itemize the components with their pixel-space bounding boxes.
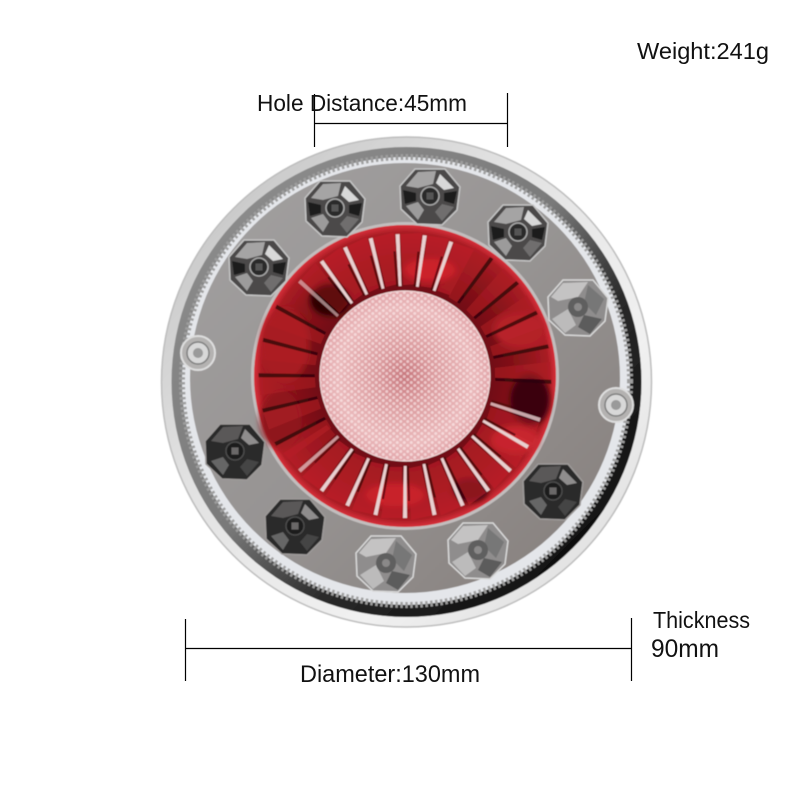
mottled reflections on the lens sides	[260, 258, 550, 507]
red lens	[251, 222, 559, 530]
thickness label: 90mm	[651, 635, 719, 663]
radial facets on the lens sides	[258, 247, 551, 461]
hole distance label: Hole Distance:45mm	[257, 90, 467, 116]
textured bezel ring	[182, 157, 630, 605]
LED: top right	[488, 205, 548, 261]
LED: bottom right	[448, 523, 508, 579]
diameter label: Diameter:130mm	[300, 661, 480, 688]
hole distance dimension	[257, 90, 508, 147]
LED: lower left	[205, 424, 265, 480]
grey reflector plate	[190, 163, 620, 593]
lens ribs	[283, 232, 542, 520]
diameter dimension	[186, 618, 632, 688]
thickness label: Thickness	[653, 607, 750, 633]
LED: upper right	[548, 280, 608, 336]
screw: right	[599, 388, 633, 422]
dark inner band of the rim	[172, 147, 642, 617]
outer chrome rim	[162, 137, 652, 627]
LED: top centre	[400, 169, 460, 225]
LED: bottom left	[265, 499, 325, 555]
product photo: round LED tail light	[162, 137, 652, 627]
weight label: Weight:241g	[637, 38, 769, 64]
LED: upper left	[229, 240, 289, 296]
screw: left	[181, 336, 215, 370]
LED: lower right	[523, 464, 583, 520]
pink dotted centre lens	[320, 291, 490, 461]
LED: bottom centre	[356, 536, 416, 592]
LED: top left	[305, 181, 365, 237]
thickness label	[651, 607, 750, 663]
